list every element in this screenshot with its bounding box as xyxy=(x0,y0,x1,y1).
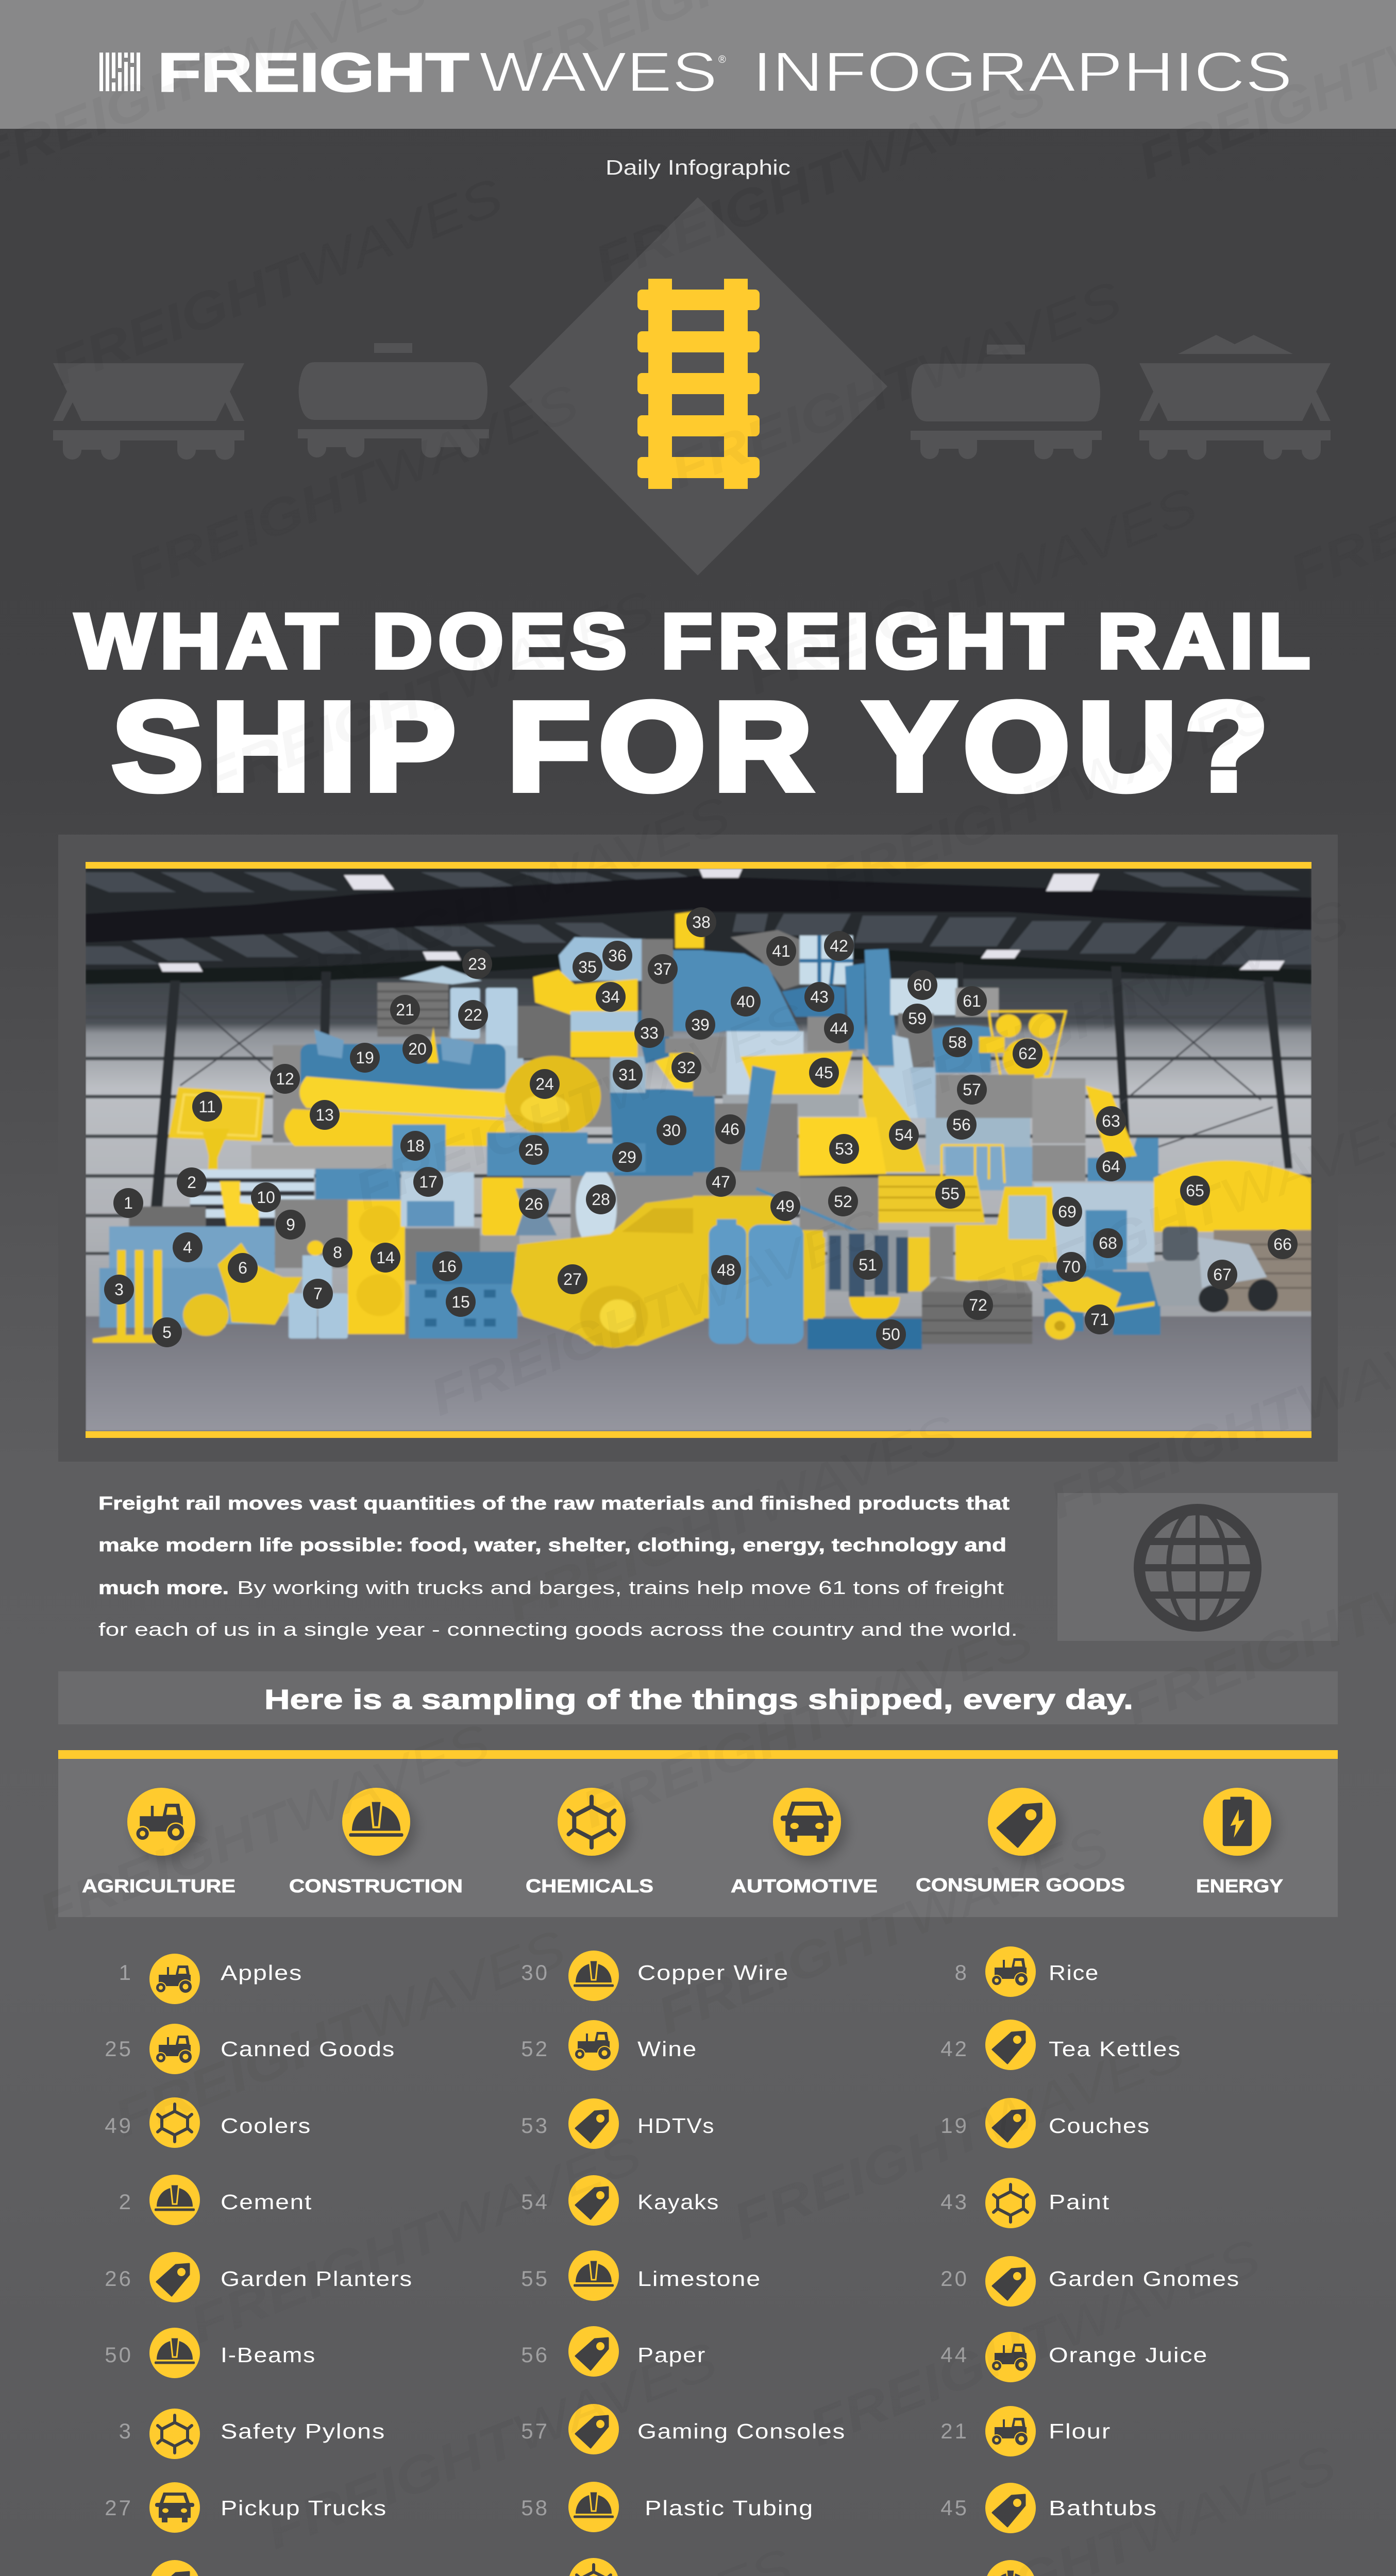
item: Wine: 52 xyxy=(521,2037,549,2061)
marker 36: 36 xyxy=(608,946,627,965)
watermark overlay: FREIGHT WAVES xyxy=(258,2331,725,2561)
marker 4 xyxy=(173,1232,203,1262)
header bar xyxy=(0,0,1396,129)
marker 66 xyxy=(1268,1229,1298,1259)
marker 51: 51 xyxy=(859,1256,877,1274)
item: Bathtubs: Bathtubs xyxy=(1049,2496,1157,2520)
marker 27 xyxy=(558,1264,587,1294)
marker 68 xyxy=(1093,1228,1123,1258)
watermark overlay: FREIGHT WAVES xyxy=(106,1919,573,2148)
marker 20 xyxy=(402,1034,432,1064)
icon: hopper car left xyxy=(53,363,244,460)
marker 18: 18 xyxy=(406,1137,425,1155)
marker 23 xyxy=(462,949,492,979)
marker 32 xyxy=(671,1053,701,1082)
item: Paper: Paper xyxy=(637,2343,706,2367)
marker 2: 2 xyxy=(187,1173,196,1192)
title line 1: WHAT DOES FREIGHT RAIL xyxy=(75,598,1316,684)
header title: INFOGRAPHICS xyxy=(752,41,1292,104)
marker 29: 29 xyxy=(618,1148,636,1166)
item: Coolers xyxy=(105,2097,311,2148)
item: Garden Planters: 26 xyxy=(105,2266,133,2291)
item: Gaming Consoles: 57 xyxy=(521,2419,549,2443)
marker 48 xyxy=(711,1255,741,1285)
marker 35: 35 xyxy=(578,958,597,976)
watermark overlay: FREIGHT WAVES xyxy=(346,992,813,1221)
marker 27: 27 xyxy=(563,1270,582,1289)
marker 54 xyxy=(889,1120,919,1150)
marker 69 xyxy=(1052,1197,1082,1227)
item: Paint: 43 xyxy=(940,2190,969,2214)
header wordmark: FREIGHT xyxy=(158,42,469,103)
intro paragraph: By working with trucks and barges, trains help move 61 tons of freight xyxy=(237,1577,1004,1598)
marker 12 xyxy=(270,1064,300,1094)
item: Orange Juice: 44 xyxy=(940,2343,969,2367)
marker 66: 66 xyxy=(1273,1235,1292,1253)
item: Gaming Consoles xyxy=(521,2404,846,2454)
item: Fertilizer xyxy=(521,2558,745,2576)
item: Rice: 8 xyxy=(955,1960,969,1985)
item: Tea Kettles: 42 xyxy=(940,2037,969,2061)
marker 8: 8 xyxy=(333,1243,342,1262)
image top rule xyxy=(86,862,1311,869)
marker 65 xyxy=(1180,1176,1210,1206)
item: Copper Wire: Copper Wire xyxy=(637,1961,789,1985)
marker 72: 72 xyxy=(969,1296,987,1314)
item: Orange Juice: Orange Juice xyxy=(1049,2343,1208,2367)
watermark overlay: FREIGHT WAVES xyxy=(801,2228,1268,2458)
marker 65: 65 xyxy=(1186,1181,1204,1200)
marker 21 xyxy=(390,995,420,1025)
number markers xyxy=(104,907,1298,1349)
marker 29 xyxy=(612,1142,642,1172)
marker 54: 54 xyxy=(895,1126,913,1144)
marker 11: 11 xyxy=(198,1097,216,1116)
marker 51 xyxy=(853,1250,883,1280)
item: Flour: Flour xyxy=(1049,2419,1111,2443)
item: Apples xyxy=(119,1954,302,2004)
item: Safety Pylons xyxy=(119,2409,385,2459)
item: Kayaks xyxy=(521,2175,719,2226)
item: Rice: Rice xyxy=(1049,1961,1099,1985)
logo bars icon xyxy=(99,53,140,91)
item: I-Beams xyxy=(105,2328,316,2378)
marker 6 xyxy=(228,1253,258,1283)
marker 28 xyxy=(586,1184,616,1214)
marker 52 xyxy=(828,1187,858,1216)
item: Cement: Cement xyxy=(221,2190,312,2214)
item: Gaming Consoles: Gaming Consoles xyxy=(637,2419,846,2443)
category: construction: CONSTRUCTION xyxy=(289,1875,463,1896)
marker 3 xyxy=(104,1275,134,1304)
item: Copper Wire: 30 xyxy=(521,1960,549,1985)
marker 69: 69 xyxy=(1058,1202,1077,1221)
marker 48: 48 xyxy=(717,1261,735,1279)
marker 24 xyxy=(530,1069,560,1099)
item: Couches xyxy=(940,2098,1150,2148)
item: HDTVs: 53 xyxy=(521,2113,549,2138)
icon: tank car right xyxy=(911,345,1102,460)
marker 47: 47 xyxy=(712,1173,730,1191)
list column 3 xyxy=(940,1946,1298,2576)
item: Plastic Tubing: 58 xyxy=(521,2496,549,2520)
item: Flour xyxy=(940,2406,1111,2456)
marker 62: 62 xyxy=(1018,1044,1037,1063)
item: Bathtubs: 45 xyxy=(940,2496,969,2520)
intro paragraph xyxy=(98,1493,1018,1640)
kicker: daily infographic: Daily Infographic xyxy=(606,156,790,179)
registered mark: ® xyxy=(718,54,726,65)
marker 26: 26 xyxy=(525,1195,543,1213)
category: energy xyxy=(1196,1788,1283,1896)
icon: globe panel xyxy=(1057,1493,1338,1641)
marker 26 xyxy=(519,1189,549,1219)
marker 10: 10 xyxy=(257,1188,275,1207)
marker 23: 23 xyxy=(468,955,486,973)
marker 56: 56 xyxy=(952,1115,971,1134)
marker 63 xyxy=(1096,1106,1126,1136)
marker 22 xyxy=(458,1000,488,1030)
marker 14: 14 xyxy=(376,1248,395,1267)
marker 46: 46 xyxy=(721,1120,739,1139)
watermark overlay: FREIGHT WAVES xyxy=(195,580,662,809)
category: automotive: AUTOMOTIVE xyxy=(731,1875,878,1896)
marker 39 xyxy=(685,1010,715,1040)
marker 61 xyxy=(957,986,987,1016)
item: Safety Pylons: 3 xyxy=(119,2419,133,2443)
marker 40: 40 xyxy=(736,992,755,1011)
item: Bathtubs xyxy=(940,2483,1157,2533)
item: Flour: 21 xyxy=(940,2419,969,2443)
item: Windows xyxy=(940,2560,1157,2576)
marker 31: 31 xyxy=(618,1065,637,1084)
marker 30: 30 xyxy=(662,1121,681,1140)
item: Wine: Wine xyxy=(637,2037,697,2061)
diamond behind rail icon xyxy=(509,197,887,575)
icon: hopper car right with coal xyxy=(1139,335,1331,460)
intro paragraph: much more. xyxy=(98,1577,229,1598)
watermark overlay: FREIGHT WAVES xyxy=(182,2125,649,2354)
item: Garden Planters: Garden Planters xyxy=(221,2267,413,2291)
watermark overlay: FREIGHT WAVES xyxy=(422,1198,889,1427)
watermark overlay: FREIGHT WAVES xyxy=(30,1713,497,1942)
watermark overlay: FREIGHT WAVES xyxy=(498,1404,965,1633)
marker 61: 61 xyxy=(963,992,981,1010)
marker 44: 44 xyxy=(830,1019,848,1038)
marker 37 xyxy=(648,954,678,984)
watermark overlay: FREIGHT WAVES xyxy=(889,889,1356,1118)
marker 58 xyxy=(943,1027,972,1057)
item: Garden Gnomes: 20 xyxy=(940,2266,969,2291)
marker 13: 13 xyxy=(315,1106,334,1124)
item: Cement: 2 xyxy=(119,2190,133,2214)
marker 64: 64 xyxy=(1102,1157,1120,1176)
watermark overlay: FREIGHT WAVES xyxy=(725,2022,1192,2251)
item: Apples: Apples xyxy=(221,1961,302,1985)
left half of goods xyxy=(86,872,705,1348)
item: Kayaks: 54 xyxy=(521,2190,549,2214)
category: automotive xyxy=(731,1788,878,1896)
marker 47 xyxy=(706,1167,736,1197)
item: Limestone: Limestone xyxy=(637,2267,761,2291)
marker 18 xyxy=(400,1131,430,1161)
item: I-Beams: 50 xyxy=(105,2343,133,2367)
marker 55 xyxy=(935,1179,965,1209)
item: Pickup Trucks xyxy=(105,2482,387,2533)
watermark overlay: FREIGHT WAVES xyxy=(662,270,1129,500)
marker 45: 45 xyxy=(815,1063,833,1082)
marker 46 xyxy=(715,1114,745,1144)
category: chemicals xyxy=(526,1788,653,1896)
watermark overlay: FREIGHT WAVES xyxy=(738,477,1205,706)
item: Paper xyxy=(521,2326,706,2377)
item: Limestone xyxy=(521,2250,761,2301)
item: Garden Planters xyxy=(105,2252,413,2302)
item: Couches: Couches xyxy=(1049,2114,1150,2138)
list column 1 xyxy=(105,1954,429,2576)
item: Canned Goods: 25 xyxy=(105,2037,133,2061)
marker 56 xyxy=(947,1110,977,1140)
marker 42 xyxy=(824,931,854,961)
marker 19: 19 xyxy=(356,1048,374,1067)
item: Pickup Trucks: 27 xyxy=(105,2496,133,2520)
intro paragraph: make modern life possible: food, water, shelter, clothing, energy, technology and xyxy=(98,1534,1006,1555)
marker 43 xyxy=(804,982,834,1012)
title line 2: SHIP FOR YOU? xyxy=(112,676,1276,817)
marker 31 xyxy=(613,1060,643,1090)
marker 55: 55 xyxy=(941,1184,960,1203)
marker 59: 59 xyxy=(908,1009,927,1028)
item: Paper: 56 xyxy=(521,2343,549,2367)
marker 6: 6 xyxy=(238,1259,247,1277)
marker 53 xyxy=(829,1134,859,1164)
marker 14 xyxy=(371,1243,400,1273)
item: Coolers: Coolers xyxy=(221,2114,311,2138)
marker 36 xyxy=(602,941,632,971)
marker 57 xyxy=(957,1075,987,1105)
marker 38: 38 xyxy=(692,913,711,931)
marker 17 xyxy=(413,1167,443,1197)
marker 22: 22 xyxy=(464,1006,482,1024)
panel: category legend xyxy=(58,1750,1338,1917)
watermark overlay: FREIGHT WAVES xyxy=(649,1816,1116,2045)
watermark overlay: FREIGHT WAVES xyxy=(586,64,1053,294)
intro paragraph: for each of us in a single year - connecting goods across the country and the world. xyxy=(98,1619,1018,1640)
banner: sampling heading xyxy=(58,1671,1338,1724)
banner: sampling heading: Here is a sampling of the things shipped, every day. xyxy=(264,1684,1133,1715)
marker 9 xyxy=(276,1210,306,1240)
item: Apples: 1 xyxy=(119,1960,133,1985)
marker 25 xyxy=(519,1135,549,1165)
item: HDTVs xyxy=(521,2098,715,2149)
marker 67 xyxy=(1207,1260,1237,1290)
category: energy: ENERGY xyxy=(1196,1875,1283,1896)
marker 25: 25 xyxy=(525,1141,543,1159)
warehouse scene xyxy=(86,869,1311,1431)
panel: warehouse image xyxy=(58,835,1338,1462)
item: Tea Kettles: Tea Kettles xyxy=(1049,2037,1181,2061)
marker 70 xyxy=(1056,1252,1086,1282)
category: agriculture: AGRICULTURE xyxy=(82,1875,236,1896)
icon: railroad track xyxy=(637,279,760,489)
marker 12: 12 xyxy=(276,1070,294,1088)
item: HDTVs: HDTVs xyxy=(637,2114,715,2138)
marker 7 xyxy=(303,1279,333,1309)
marker 32: 32 xyxy=(677,1058,696,1077)
item: Limestone: 55 xyxy=(521,2266,549,2291)
marker 71: 71 xyxy=(1090,1310,1109,1329)
marker 33 xyxy=(634,1018,664,1048)
marker 4: 4 xyxy=(183,1238,192,1257)
item: Plastic Tubing: Plastic Tubing xyxy=(645,2496,814,2520)
marker 49: 49 xyxy=(776,1197,795,1215)
marker 10 xyxy=(251,1182,281,1212)
item: Kayaks: Kayaks xyxy=(637,2190,719,2214)
marker 37: 37 xyxy=(653,960,672,978)
item: Canned Goods: Canned Goods xyxy=(221,2037,395,2061)
item: Garden Gnomes xyxy=(940,2256,1240,2307)
marker 34 xyxy=(596,982,626,1012)
marker 70: 70 xyxy=(1062,1258,1081,1276)
category: chemicals: CHEMICALS xyxy=(526,1875,653,1896)
intro paragraph: Freight rail moves vast quantities of the raw materials and finished products that xyxy=(98,1493,1010,1514)
marker 13 xyxy=(310,1100,340,1130)
marker 64 xyxy=(1096,1151,1126,1181)
marker 44 xyxy=(824,1013,854,1043)
watermark overlay: FREIGHT WAVES xyxy=(43,167,510,397)
list column 2 xyxy=(521,1951,846,2576)
marker 5: 5 xyxy=(162,1323,172,1342)
marker 34: 34 xyxy=(601,988,620,1006)
marker 67: 67 xyxy=(1213,1265,1232,1284)
marker 60: 60 xyxy=(913,976,932,994)
marker 40 xyxy=(731,987,761,1016)
item: Canned Goods xyxy=(105,2024,395,2074)
marker 58: 58 xyxy=(948,1033,967,1052)
item: Coolers: 49 xyxy=(105,2113,133,2138)
category: consumer goods: CONSUMER GOODS xyxy=(916,1874,1125,1895)
marker 7: 7 xyxy=(313,1284,323,1303)
watermark overlay: FREIGHT WAVES xyxy=(271,786,737,1015)
marker 1: 1 xyxy=(124,1194,133,1212)
item: Paint xyxy=(940,2178,1110,2228)
watermark overlay: FREIGHT WAVES xyxy=(965,1095,1396,1324)
item: Tea Kettles xyxy=(940,2020,1181,2070)
marker 17: 17 xyxy=(419,1173,438,1191)
watermark overlay: FREIGHT WAVES xyxy=(119,374,586,603)
marker 68: 68 xyxy=(1099,1234,1117,1252)
marker 45 xyxy=(809,1058,839,1088)
marker 50 xyxy=(876,1319,906,1349)
image bottom rule xyxy=(86,1431,1311,1438)
item: Clothing xyxy=(105,2560,321,2576)
item: Plastic Tubing xyxy=(521,2482,814,2532)
marker 3: 3 xyxy=(114,1280,124,1299)
item: Rice xyxy=(955,1946,1099,1997)
marker 57: 57 xyxy=(963,1080,981,1099)
title xyxy=(75,598,1316,817)
marker 72 xyxy=(963,1290,993,1320)
marker 52: 52 xyxy=(834,1192,852,1211)
item: Safety Pylons: Safety Pylons xyxy=(221,2419,385,2443)
marker 49 xyxy=(770,1191,800,1221)
marker 42: 42 xyxy=(830,937,848,955)
marker 39: 39 xyxy=(691,1015,710,1034)
item: Garden Gnomes: Garden Gnomes xyxy=(1049,2267,1240,2291)
marker 24: 24 xyxy=(535,1075,554,1093)
marker 1 xyxy=(113,1188,143,1218)
marker 19 xyxy=(350,1043,380,1073)
marker 71 xyxy=(1085,1304,1115,1334)
watermark overlay: FREIGHT WAVES xyxy=(574,1610,1040,1839)
item: Cement xyxy=(119,2175,312,2225)
icon: tank car left xyxy=(298,343,489,457)
category: agriculture xyxy=(82,1788,236,1896)
marker 16 xyxy=(432,1251,462,1281)
category: consumer goods xyxy=(916,1788,1125,1895)
marker 16: 16 xyxy=(438,1257,457,1276)
item: Wine xyxy=(521,2020,697,2071)
item: Orange Juice xyxy=(940,2332,1208,2382)
marker 63: 63 xyxy=(1102,1112,1120,1130)
marker 30 xyxy=(657,1115,686,1145)
marker 15: 15 xyxy=(451,1293,470,1311)
category: construction xyxy=(289,1788,463,1896)
marker 5 xyxy=(152,1317,182,1347)
marker 50: 50 xyxy=(882,1325,900,1344)
marker 38 xyxy=(686,907,716,937)
item: Couches: 19 xyxy=(940,2113,969,2138)
marker 41: 41 xyxy=(772,942,790,960)
marker 2 xyxy=(177,1167,207,1197)
marker 35 xyxy=(573,952,602,982)
header wordmark second part: WAVES xyxy=(479,41,717,104)
marker 15 xyxy=(446,1287,476,1317)
marker 21: 21 xyxy=(396,1001,414,1019)
marker 60 xyxy=(907,970,937,1000)
marker 33: 33 xyxy=(640,1024,659,1042)
marker 59 xyxy=(902,1004,932,1033)
marker 9: 9 xyxy=(286,1215,295,1234)
marker 11 xyxy=(192,1092,222,1122)
marker 20: 20 xyxy=(408,1040,427,1058)
item: Pickup Trucks: Pickup Trucks xyxy=(221,2496,387,2520)
marker 8 xyxy=(323,1238,352,1267)
right half of goods xyxy=(689,869,1311,1349)
item: I-Beams: I-Beams xyxy=(221,2343,316,2367)
marker 53: 53 xyxy=(835,1140,853,1158)
marker 62 xyxy=(1013,1039,1042,1069)
marker 41 xyxy=(766,936,796,966)
item: Copper Wire xyxy=(521,1951,789,2001)
watermark overlay: FREIGHT WAVES xyxy=(814,683,1281,912)
marker 43: 43 xyxy=(810,988,829,1006)
marker 28: 28 xyxy=(592,1190,610,1209)
item: Paint: Paint xyxy=(1049,2190,1110,2214)
